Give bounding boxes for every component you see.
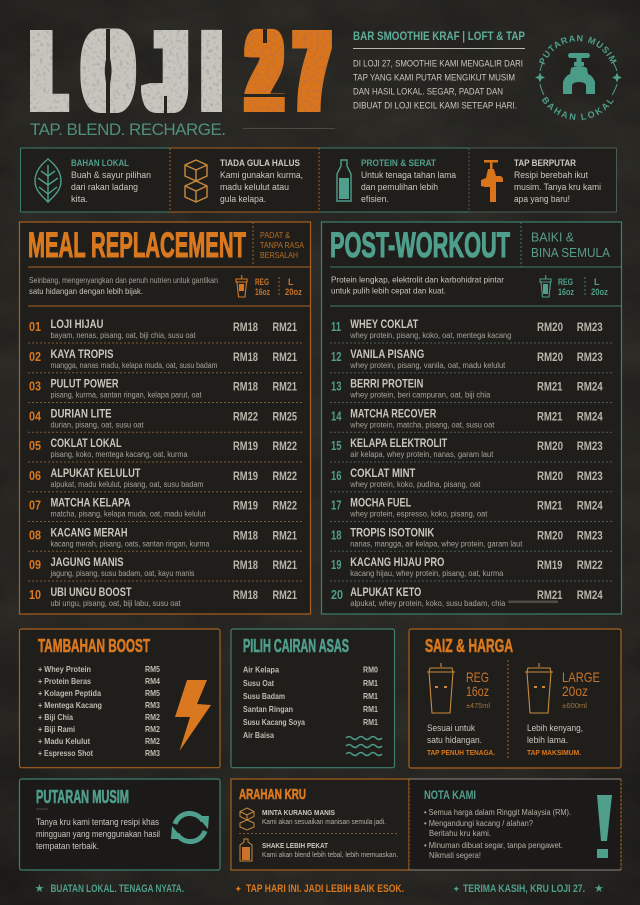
row 05: pisang, koko, mentega kacang, oat, kurma — [50, 450, 188, 459]
row 06: alpukat, madu kelulut, pisang, oat, susu badam — [50, 480, 204, 489]
row 09: 09 — [29, 557, 41, 572]
feature: bahan lokal: BAHAN LOKAL — [71, 158, 129, 169]
regular size: REG — [466, 669, 489, 685]
notes: • Semua harga dalam Ringgit Malaysia (RM). — [424, 808, 571, 817]
row 14: whey protein, matcha, pisang, oat, susu oat — [349, 420, 495, 429]
liquid list: Air Kelapa — [243, 665, 279, 675]
heading: PUTARAN MUSIM — [36, 787, 129, 807]
large size: lebih lama. — [527, 735, 568, 746]
liquid list: RM1 — [363, 678, 378, 688]
row 01: 01 — [29, 319, 41, 334]
intro block: DIBUAT DI LOJI KECIL KAMI SETEAP HARI. — [353, 100, 517, 111]
feature: protein dan serat: PROTEIN & SERAT — [361, 158, 436, 169]
row 19: KACANG HIJAU PRO — [350, 555, 444, 569]
row 18: RM23 — [577, 528, 603, 542]
footer right: TERIMA KASIH, KRU LOJI 27. — [463, 883, 585, 895]
size labels: 16oz — [558, 287, 574, 297]
boost list: RM4 — [145, 676, 160, 686]
row 11: RM20 — [537, 320, 563, 334]
footer right: ★ — [594, 883, 604, 895]
icon: large cup — [525, 663, 553, 713]
description — [331, 275, 504, 296]
feature strip — [20, 148, 616, 212]
row 03: RM18 — [233, 380, 258, 394]
size labels — [558, 277, 608, 297]
boost list: RM3 — [145, 748, 160, 758]
row 01: RM21 — [272, 320, 297, 334]
large size: 20oz — [562, 683, 588, 699]
row 02: KAYA TROPIS — [50, 347, 114, 361]
row 09: JAGUNG MANIS — [50, 555, 124, 569]
row 14 — [331, 406, 603, 429]
row 04: RM25 — [272, 409, 297, 423]
row 12: whey protein, pisang, vanila, oat, madu kelulut — [349, 361, 506, 370]
row 04: RM22 — [233, 409, 258, 423]
liquid list: RM1 — [363, 717, 378, 727]
liquid list: Santan Ringan — [243, 704, 293, 714]
row 08: RM21 — [272, 528, 297, 542]
feature: tiada gula halus: TIADA GULA HALUS — [220, 158, 300, 169]
intro block: TAP YANG KAMI PUTAR MENGIKUT MUSIM — [353, 72, 515, 83]
badge: putaran musim: BAHAN LOKAL — [542, 96, 614, 120]
regular size: satu hidangan. — [427, 735, 482, 746]
large size: Lebih kenyang, — [527, 723, 583, 734]
intro block: DAN HASIL LOKAL. SEGAR, PADAT DAN — [353, 86, 503, 97]
tip: shake pekat: SHAKE LEBIH PEKAT — [262, 841, 328, 850]
row 08: KACANG MERAH — [50, 525, 128, 539]
menu rows 11-20 — [330, 317, 612, 608]
boost list: + Espresso Shot — [38, 748, 93, 758]
row 18: nanas, mangga, air kelapa, whey protein, garam laut — [350, 539, 523, 548]
row 13: BERRI PROTEIN — [350, 376, 423, 390]
liquid list: Susu Oat — [243, 678, 274, 688]
title: LOJI 27: L — [35, 10, 62, 133]
row 20: ALPUKAT KETO — [350, 585, 421, 599]
regular size: Sesuai untuk — [427, 723, 475, 734]
row 16: 16 — [331, 468, 342, 483]
boost list: + Mentega Kacang — [38, 700, 102, 710]
liquid list: Susu Badam — [243, 691, 285, 701]
size labels — [255, 277, 302, 297]
notes: Beritahu kru kami. — [429, 829, 491, 838]
regular size: ±475ml — [466, 701, 490, 710]
heading: meal replacement: MEAL REPLACEMENT — [28, 226, 246, 265]
body — [36, 817, 160, 852]
row 10: UBI UNGU BOOST — [50, 585, 132, 599]
feature: tiada gula halus: Kami gunakan kurma, — [220, 170, 303, 181]
heading: ARAHAN KRU — [239, 786, 306, 803]
icon: waves — [346, 736, 382, 756]
size labels: REG — [255, 277, 269, 287]
body: mingguan yang menggunakan hasil — [36, 829, 160, 840]
footer left: BUATAN LOKAL. TENAGA NYATA. — [50, 883, 184, 895]
feature: bahan lokal: Buah & sayur pilihan — [71, 170, 151, 181]
row 05: 05 — [29, 438, 41, 453]
row 04: durian, pisang, oat, susu oat — [50, 420, 144, 429]
liquid list: Air Baisa — [243, 730, 274, 740]
notes — [424, 808, 571, 860]
icon: regular cup — [427, 663, 455, 713]
menu rows 01-10 — [28, 317, 303, 608]
row 19: RM22 — [577, 558, 603, 572]
feature: protein dan serat: Untuk tenaga tahan lama — [361, 170, 457, 181]
badge: putaran musim — [535, 35, 622, 120]
description — [29, 275, 218, 296]
liquid list: RM1 — [363, 704, 378, 714]
row 03: RM21 — [272, 380, 297, 394]
row 12: 12 — [331, 349, 342, 364]
body: Tanya kru kami tentang resipi khas — [36, 817, 159, 828]
icon: lightning bolt — [175, 680, 211, 751]
row 12: RM23 — [577, 350, 603, 364]
footer left — [34, 883, 184, 895]
boost list: + Biji Chia — [38, 712, 73, 722]
size labels: L — [594, 277, 600, 287]
row 06: ALPUKAT KELULUT — [50, 466, 141, 480]
panel: putaran musim — [20, 779, 220, 870]
boost list: RM5 — [145, 664, 160, 674]
row 03: PULUT POWER — [50, 376, 119, 390]
row 16: RM23 — [577, 469, 603, 483]
row 10: ubi ungu, pisang, oat, biji labu, susu oat — [50, 599, 181, 608]
sub-heading: TANPA RASA — [260, 240, 304, 250]
row 16: COKLAT MINT — [350, 466, 416, 480]
panel: meal replacement — [20, 222, 310, 614]
row 04: DURIAN LITE — [50, 406, 112, 420]
tip: shake pekat: Kami akan blend lebih tebal, lebih memuaskan. — [262, 852, 398, 859]
row 11: whey protein, pisang, koko, oat, mentega kacang — [349, 331, 511, 340]
row 15: 15 — [331, 438, 342, 453]
row 07: RM19 — [233, 498, 258, 512]
regular size: TAP PENUH TENAGA. — [427, 748, 495, 757]
title: LOJI 27 — [30, 10, 332, 133]
boost list: + Kolagen Peptida — [38, 688, 101, 698]
icon: exclamation — [597, 795, 612, 858]
row 13 — [331, 376, 603, 400]
row 15: RM23 — [577, 439, 603, 453]
title: LOJI 27: 2 — [250, 10, 278, 133]
row 15: air kelapa, whey protein, nanas, garam laut — [350, 450, 494, 459]
badge: putaran musim: PUTARAN MUSIM — [538, 35, 617, 65]
row 08: kacang merah, pisang, oats, santan ringan, kurma — [50, 539, 210, 548]
row 06: RM22 — [272, 469, 297, 483]
row 02: RM18 — [233, 350, 258, 364]
feature: protein dan serat: dan pemulihan lebih — [361, 182, 438, 193]
description: Seinbang, mengenyangkan dan penuh nutrien untuk gantikan — [29, 275, 218, 285]
heading: SAIZ & HARGA — [425, 636, 513, 656]
row 05: RM22 — [272, 439, 297, 453]
row 17: MOCHA FUEL — [350, 496, 411, 510]
row 08 — [29, 525, 297, 548]
boost list: RM3 — [145, 700, 160, 710]
title: LOJI 27: O — [86, 10, 131, 133]
row 20 — [331, 585, 603, 608]
liquid list — [243, 665, 378, 740]
boost list: RM5 — [145, 688, 160, 698]
title: LOJI 27: J — [148, 10, 184, 133]
boost list: RM2 — [145, 724, 160, 734]
boost list: + Madu Kelulut — [38, 736, 90, 746]
stencil slits in the title — [106, 29, 289, 115]
row 05: COKLAT LOKAL — [50, 436, 122, 450]
row 11: 11 — [331, 319, 341, 334]
sub-heading: BERSALAH — [260, 250, 298, 260]
row 13: whey protein, beri campuran, oat, biji chia — [349, 390, 491, 400]
icon: rotation arrows — [171, 813, 209, 842]
description: satu hidangan dengan lebih bijak. — [29, 286, 143, 296]
row 09: jagung, pisang, susu badam, oat, kayu manis — [50, 569, 195, 578]
row 08: 08 — [29, 527, 41, 542]
row 17 — [331, 496, 603, 518]
description: untuk pulih lebih cepat dan kuat. — [331, 286, 446, 296]
sub-heading — [260, 230, 304, 260]
notes: Nikmati segera! — [429, 851, 481, 860]
row 14: 14 — [331, 408, 342, 423]
heading: PILIH CAIRAN ASAS — [243, 636, 349, 656]
intro block: DI LOJI 27, SMOOTHIE KAMI MENGALIR DARI — [353, 59, 523, 70]
row 07: matcha, pisang, kelapa muda, oat, madu kelulut — [50, 510, 206, 518]
body: tempatan terbaik. — [36, 841, 99, 852]
row 13: RM21 — [537, 380, 563, 394]
heading: post-workout: POST-WORKOUT — [330, 226, 510, 265]
panel: pilih cairan asas — [231, 629, 394, 768]
row 13: 13 — [331, 378, 342, 394]
boost list: + Biji Rami — [38, 724, 75, 734]
size labels: 16oz — [255, 287, 270, 297]
row 14: MATCHA RECOVER — [350, 406, 437, 420]
row 14: RM24 — [577, 409, 603, 423]
row 01 — [29, 317, 297, 340]
size labels: L — [288, 277, 294, 287]
liquid list: RM0 — [363, 665, 378, 675]
feature: tap berputar: Resipi berebah ikut — [514, 170, 588, 181]
row 10: RM21 — [272, 588, 297, 602]
icon: cup — [236, 275, 247, 297]
row 01: RM18 — [233, 320, 258, 334]
sub-heading: PADAT & — [260, 230, 290, 240]
row 16: whey protein, koko, pudina, pisang, oat — [349, 480, 481, 489]
row 15 — [331, 436, 603, 459]
boost list: + Whey Protein — [38, 664, 91, 674]
row 10: 10 — [29, 587, 41, 602]
row 08: RM18 — [233, 528, 258, 542]
intro block: BAR SMOOTHIE KRAF | LOFT & TAP — [353, 29, 525, 43]
title: LOJI 27: I — [207, 10, 216, 133]
row 09 — [29, 555, 297, 578]
row 05: RM19 — [233, 439, 258, 453]
description: Protein lengkap, elektrolit dan karbohidrat pintar — [331, 275, 504, 285]
notes: • Minuman dibuat segar, tanpa pengawet. — [424, 841, 563, 850]
boost list: RM2 — [145, 712, 160, 722]
row 17: RM24 — [577, 498, 603, 512]
row 04: 04 — [29, 408, 42, 423]
liquid list: RM1 — [363, 691, 378, 701]
tip: kurang manis: MINTA KURANG MANIS — [262, 808, 335, 817]
row 12: VANILA PISANG — [350, 347, 424, 361]
large size: TAP MAKSIMUM. — [527, 748, 581, 757]
row 10: RM18 — [233, 588, 258, 602]
feature: tiada gula halus — [185, 158, 303, 205]
row 11: RM23 — [577, 320, 603, 334]
row 20: 20 — [331, 587, 343, 602]
regular size — [427, 669, 495, 757]
row 07 — [29, 496, 297, 518]
regular size: 16oz — [466, 683, 489, 699]
panel: post-workout — [322, 222, 622, 614]
tagline: TAP. BLEND. RECHARGE. — [30, 120, 226, 139]
row 12: RM20 — [537, 350, 563, 364]
row 11 — [331, 317, 603, 340]
size labels: 20oz — [285, 287, 302, 297]
panel: tambahan boost — [20, 629, 220, 768]
feature: bahan lokal: dari rakan ladang — [71, 182, 138, 193]
row 10 — [29, 585, 297, 608]
sub-heading — [531, 230, 610, 260]
row 17: RM21 — [537, 498, 563, 512]
row 06: RM19 — [233, 469, 258, 483]
large size: ±600ml — [562, 701, 587, 710]
row 18: RM20 — [537, 528, 563, 542]
boost list: RM2 — [145, 736, 160, 746]
row 04 — [29, 406, 297, 429]
row 17: 17 — [331, 498, 342, 512]
row 17: whey protein, espresso, koko, pisang, oat — [349, 510, 488, 518]
size labels: 20oz — [591, 287, 608, 297]
tip: kurang manis — [240, 808, 386, 830]
feature: protein dan serat: efisien. — [361, 194, 389, 205]
liquid list: Susu Kacang Soya — [243, 717, 305, 727]
panel: arahan kru — [231, 779, 409, 870]
row 01: bayam, nenas, pisang, oat, biji chia, susu oat — [50, 331, 196, 340]
heading: TAMBAHAN BOOST — [38, 636, 150, 656]
row 03: 03 — [29, 378, 41, 394]
footer centre: ✦ — [234, 884, 242, 894]
footer centre: TAP HARI INI. JADI LEBIH BAIK ESOK. — [246, 883, 404, 895]
feature: tap berputar: musim. Tanya kru kami — [514, 182, 601, 193]
feature: bahan lokal: kita. — [71, 194, 88, 205]
feature: tap berputar: TAP BERPUTAR — [514, 158, 576, 169]
row 19 — [331, 555, 603, 578]
feature: bahan lokal — [35, 158, 151, 205]
row 18 — [331, 525, 603, 548]
row 12 — [331, 347, 603, 370]
panel: nota kami — [409, 779, 621, 870]
panel: saiz dan harga — [409, 629, 621, 768]
intro block — [353, 29, 525, 111]
icon: cup — [540, 275, 551, 297]
row 15: KELAPA ELEKTROLIT — [350, 436, 448, 450]
feature: tiada gula halus: madu kelulut atau — [220, 182, 289, 193]
feature: protein dan serat — [337, 158, 457, 205]
row 03: pisang, kurma, santan ringan, kelapa parut, oat — [50, 390, 202, 400]
icon: tap — [563, 53, 595, 94]
row 13: RM24 — [577, 380, 603, 394]
row 09: RM18 — [233, 558, 258, 572]
sub-heading: BINA SEMULA — [531, 245, 610, 260]
large size: LARGE — [562, 669, 600, 685]
boost list: + Protein Beras — [38, 676, 91, 686]
row 02: 02 — [29, 349, 41, 364]
size labels: REG — [558, 277, 573, 287]
feature: tap berputar: apa yang baru! — [514, 194, 570, 205]
row 16 — [331, 466, 603, 489]
footer left: ★ — [34, 883, 44, 895]
row 18: TROPIS ISOTONIK — [350, 525, 435, 539]
row 02: mangga, nanas madu, kelapa muda, oat, susu badam — [50, 361, 218, 370]
row 18: 18 — [331, 527, 342, 542]
row 14: RM21 — [537, 409, 563, 423]
row 16: RM20 — [537, 469, 563, 483]
row 01: LOJI HIJAU — [50, 317, 104, 331]
footer right: ✦ — [452, 884, 460, 894]
title: LOJI 27: 7 — [298, 10, 326, 133]
row 19: kacang hijau, whey protein, pisang, oat, kurma — [350, 569, 504, 578]
row 19: RM19 — [537, 558, 563, 572]
row 05 — [29, 436, 297, 459]
notes: • Mengandungi kacang / alahan? — [424, 819, 534, 828]
row 07: 07 — [29, 498, 41, 512]
tip: shake pekat — [240, 839, 398, 861]
row 11: WHEY COKLAT — [350, 317, 419, 331]
boost list — [38, 664, 160, 758]
row 20: alpukat, whey protein, koko, susu badam, chia — [350, 599, 506, 608]
row 20: RM24 — [577, 588, 603, 602]
row 03 — [29, 376, 297, 400]
heading: NOTA KAMI — [424, 788, 476, 802]
feature: tap berputar — [481, 158, 601, 205]
large size — [527, 669, 600, 757]
row 02 — [29, 347, 297, 370]
row 07: MATCHA KELAPA — [50, 496, 131, 510]
tip: kurang manis: Kami akan sesuaikan manisan semula jadi. — [262, 819, 386, 826]
feature: tiada gula halus: gula kelapa. — [220, 194, 266, 205]
row 07: RM22 — [272, 498, 297, 512]
row 06: 06 — [29, 468, 41, 483]
row 20: RM21 — [537, 588, 563, 602]
row 02: RM21 — [272, 350, 297, 364]
row 06 — [29, 466, 297, 489]
row 19: 19 — [331, 557, 342, 572]
sub-heading: BAIKI & — [531, 230, 574, 245]
row 15: RM20 — [537, 439, 563, 453]
row 09: RM21 — [272, 558, 297, 572]
